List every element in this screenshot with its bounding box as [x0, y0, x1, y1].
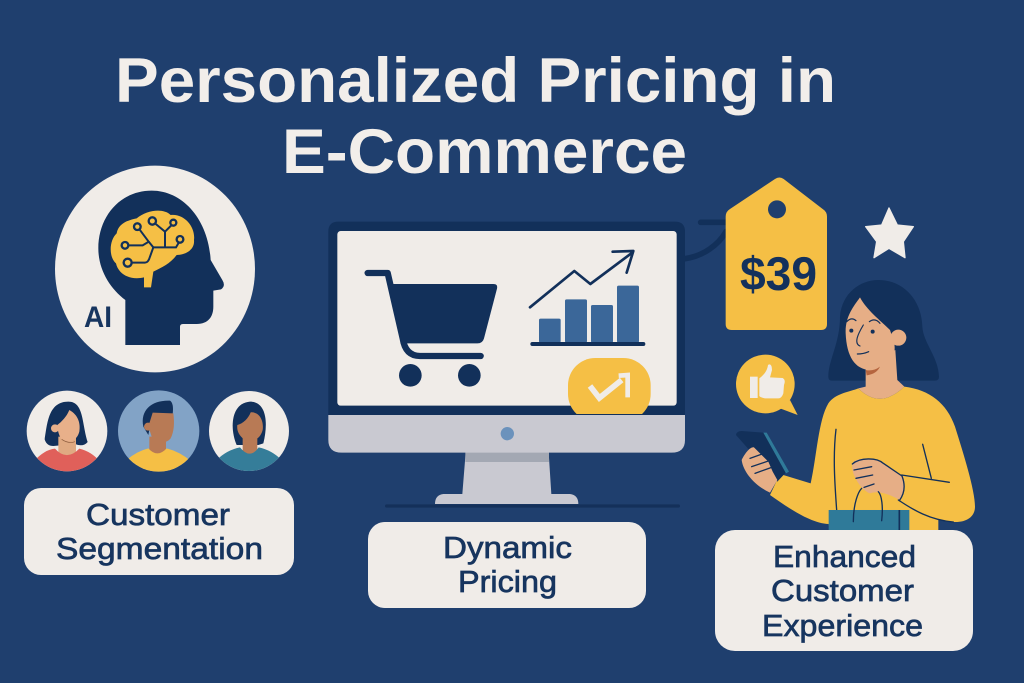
customer avatars [27, 390, 289, 480]
label: customer segmentation [24, 488, 294, 575]
icon: star [866, 208, 913, 258]
label: dynamic pricing [368, 522, 646, 608]
label: enhanced customer experience [715, 530, 973, 651]
AI label: AI [84, 301, 112, 334]
label: enhanced customer experience: Experience [762, 608, 923, 643]
label: customer segmentation: Segmentation [56, 531, 263, 566]
panel: enhanced customer experience [685, 177, 975, 651]
avatar: woman in red [27, 391, 107, 480]
label: customer segmentation: Customer [86, 497, 230, 532]
icon: thumbs-up bubble [736, 355, 798, 415]
label: dynamic pricing: Pricing [458, 564, 557, 599]
icon: shopping cart [368, 273, 497, 387]
avatar: woman in teal [209, 391, 289, 471]
monitor [328, 222, 685, 508]
title [115, 46, 836, 187]
icon: yellow check badge [568, 358, 651, 414]
price: $39 [740, 247, 817, 300]
avatar: man in yellow [118, 390, 199, 480]
bar chart with trend arrow [530, 251, 643, 344]
title: E-Commerce [282, 117, 687, 187]
label: enhanced customer experience: Enhanced [773, 539, 916, 574]
price tag with cord [685, 177, 827, 330]
label: dynamic pricing: Dynamic [443, 530, 572, 565]
panel: dynamic pricing [328, 222, 685, 608]
AI head icon [55, 166, 255, 372]
panel: customer segmentation [24, 166, 294, 575]
title: Personalized Pricing in [115, 46, 836, 116]
label: enhanced customer experience: Customer [771, 573, 914, 608]
woman with phone and shopping bag [736, 280, 975, 533]
